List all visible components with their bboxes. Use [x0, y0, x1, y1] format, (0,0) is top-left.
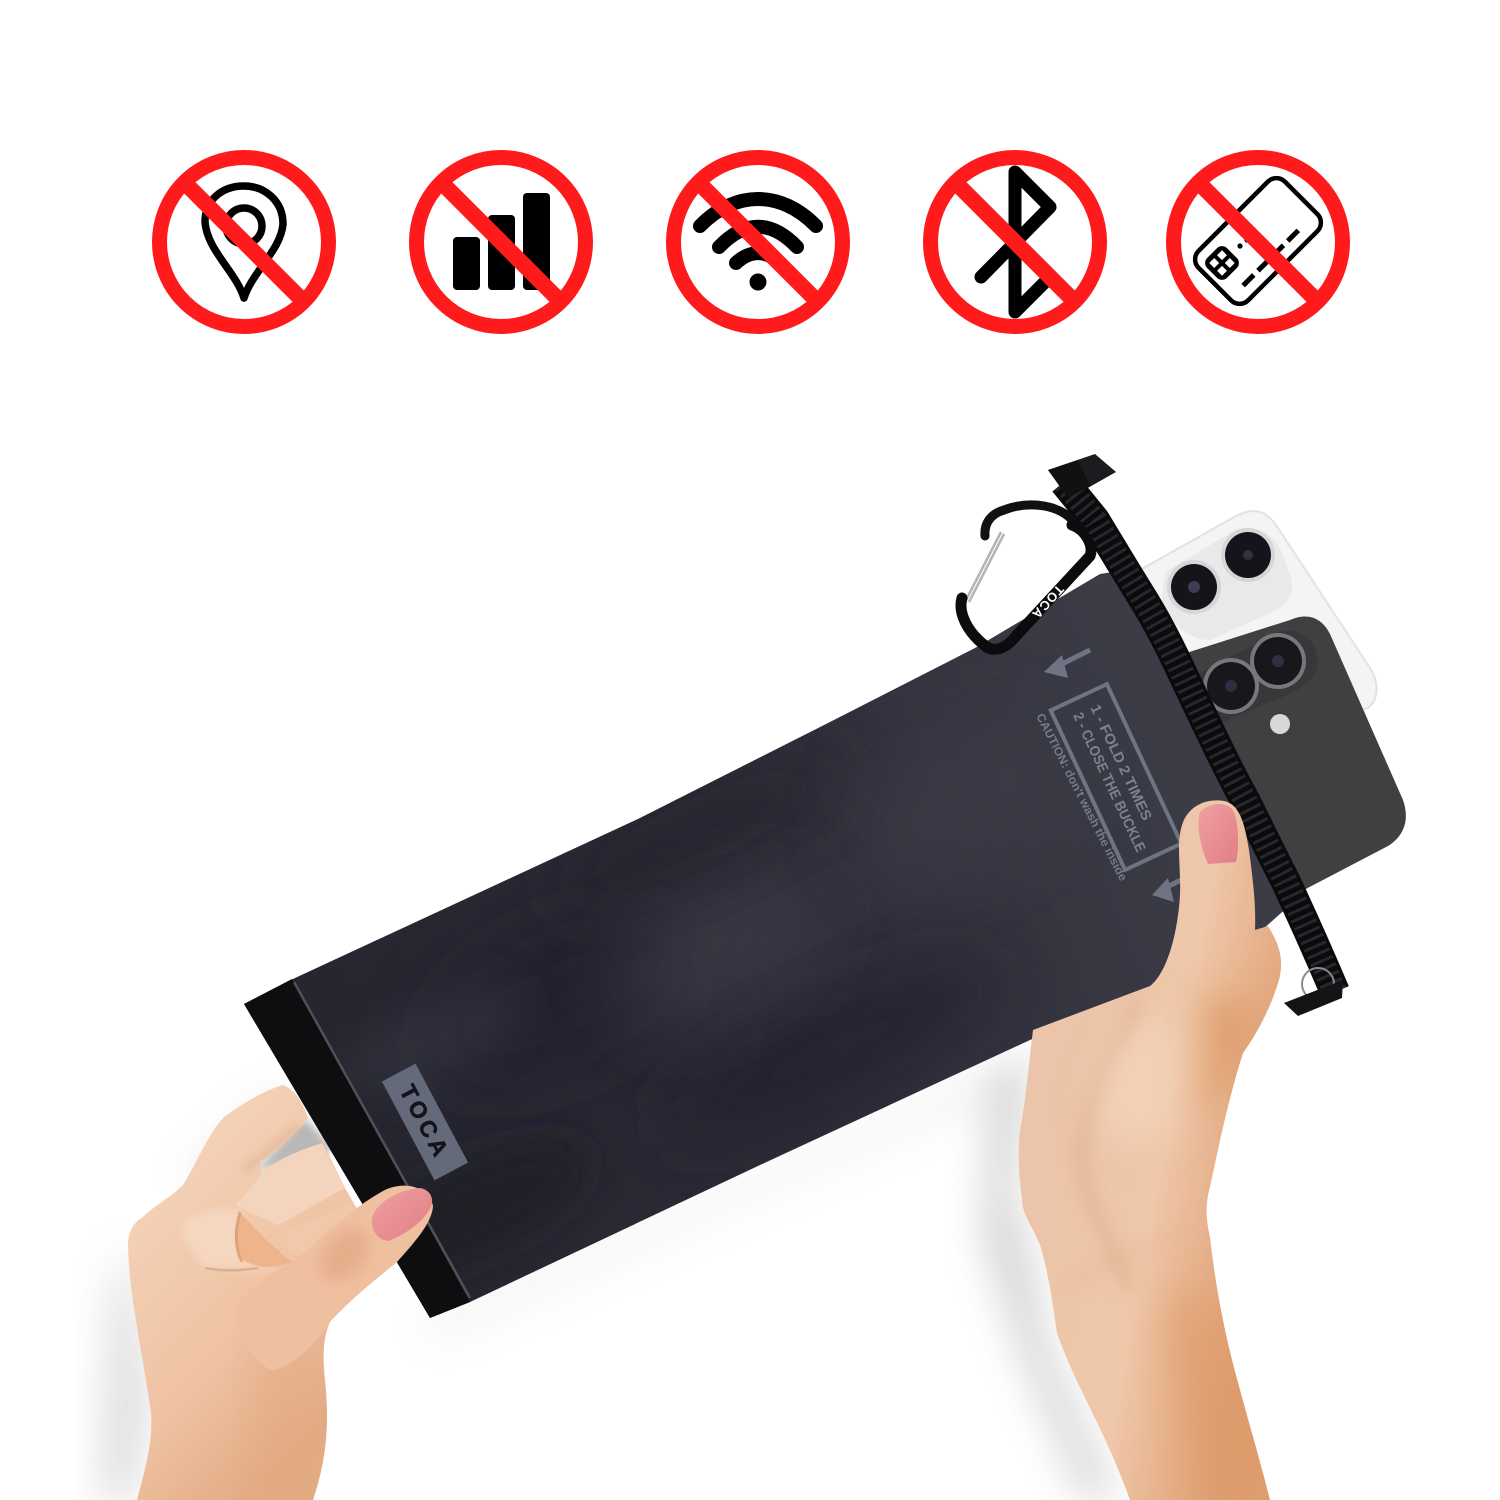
carabiner clip [961, 505, 1091, 649]
arrow: top [1044, 650, 1090, 678]
logo label: TOCA [395, 1080, 455, 1164]
soft drop shadows [100, 1050, 1115, 1500]
logo label [382, 1064, 468, 1180]
icon row: blocked signals [160, 158, 1342, 326]
phones behind the pouch [1140, 511, 1406, 900]
left hand, palm and fingers [128, 1085, 375, 1500]
instruction box [1051, 684, 1181, 870]
instruction box: 1 - FOLD 2 TIMES [1087, 702, 1154, 824]
infographic canvas [88, 150, 1406, 1500]
right thumb nail [1198, 804, 1238, 864]
dark phone [1180, 616, 1406, 900]
icon: no contactless card [1174, 158, 1342, 326]
drawstring strap [1048, 454, 1343, 1016]
wire gate [966, 532, 1004, 602]
pouch [244, 570, 1290, 1318]
left thumb nail [372, 1188, 432, 1241]
left thumb with nail [238, 1186, 433, 1370]
icon: no cellular signal [416, 158, 586, 326]
icon: no wifi [674, 158, 842, 326]
arrow: bottom [1152, 873, 1195, 902]
icon: no bluetooth [930, 158, 1100, 326]
right hand and forearm [1019, 800, 1281, 1500]
instruction box: 2 - CLOSE THE BUCKLE [1069, 710, 1148, 855]
white phone [1140, 511, 1377, 760]
fabric mottling [384, 730, 988, 1282]
folded hem [244, 979, 470, 1318]
carabiner brand text: TOCA [1029, 582, 1067, 622]
icon: no GPS location [160, 158, 328, 326]
pouch body [244, 570, 1290, 1318]
strap end ring [1284, 968, 1343, 1016]
caution text: CAUTION: don't wash the inside [1033, 711, 1130, 883]
shadow gap between fingers [255, 1118, 335, 1172]
hem stitch line [294, 982, 470, 1298]
